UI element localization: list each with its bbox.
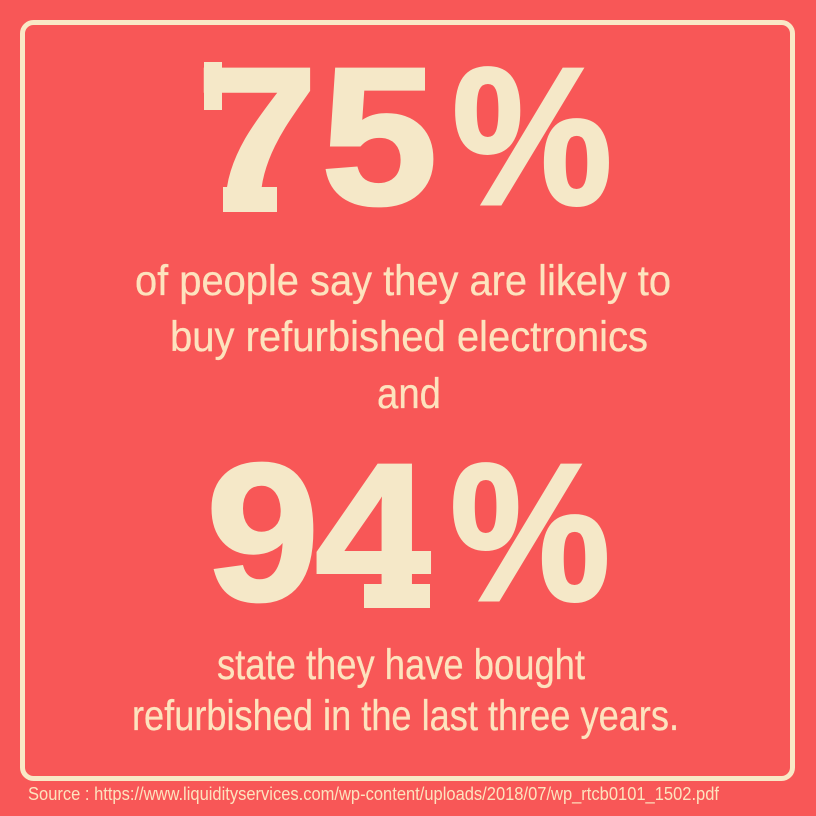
text block: bought refurbished: refurbished in the last three years. (132, 692, 679, 740)
statistic: 75% (196, 27, 612, 246)
text block: likely to buy refurbished: buy refurbished electronics (170, 313, 648, 361)
statistic: 75%: 7 (196, 28, 318, 246)
statistic: 75%: % (452, 27, 612, 246)
text block: likely to buy refurbished: and (377, 370, 441, 418)
statistic: 94%: 9 (206, 424, 319, 642)
text block: bought refurbished: state they have bought (217, 641, 585, 689)
text block: likely to buy refurbished: of people say they are likely to (135, 257, 671, 305)
statistic: 94% (206, 422, 610, 642)
text block: likely to buy refurbished (135, 257, 671, 418)
text block: bought refurbished (132, 641, 679, 740)
source line: Source : https://www.liquidityservices.com/wp-content/uploads/2018/07/wp_rtcb0101_1502.pdf (28, 784, 720, 805)
statistic: 75%: 5 (321, 27, 438, 246)
statistic: 94%: 4 (315, 422, 431, 642)
statistic: 94%: % (450, 423, 610, 642)
